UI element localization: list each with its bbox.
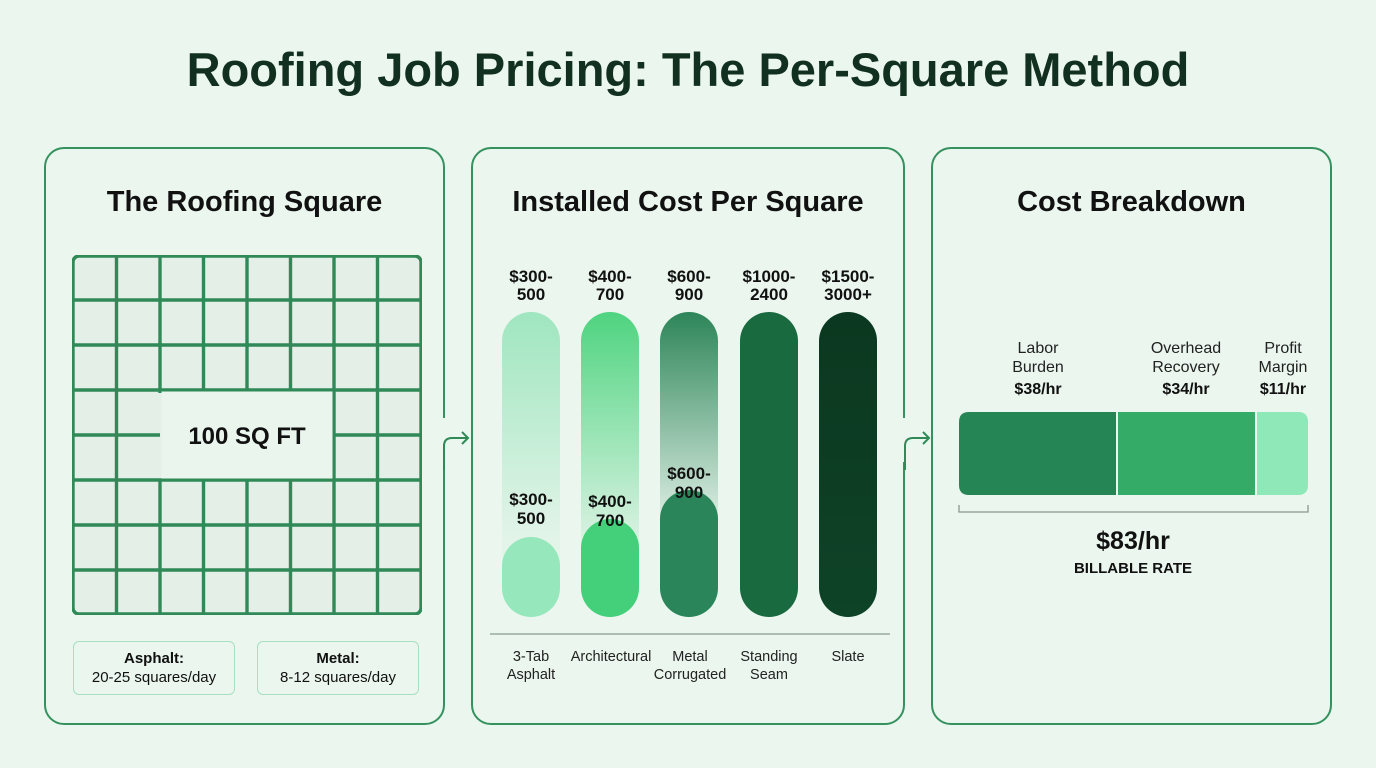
panel: installed cost (471, 147, 905, 725)
bar chart (490, 267, 890, 683)
callout: metal: Metal: (316, 650, 360, 667)
stacked bar chart: Recovery (1152, 359, 1220, 376)
bar chart: Corrugated (654, 667, 726, 683)
callout: metal (257, 641, 419, 695)
grid illustration (72, 255, 422, 615)
heading: roofing square: The Roofing Square (107, 186, 382, 218)
stacked bar chart: $38/hr (1014, 381, 1062, 398)
bar chart: Standing (740, 649, 798, 665)
stacked bar chart: Burden (1012, 359, 1064, 376)
stacked bar chart: Profit (1264, 340, 1302, 357)
stacked bar chart: $11/hr (1260, 381, 1306, 398)
bar chart: 3-Tab (513, 649, 549, 665)
bar chart: $1000- (743, 267, 795, 286)
callout: asphalt (73, 641, 235, 695)
bar chart: 700 (596, 511, 624, 530)
bar chart: Slate (831, 649, 865, 665)
bar chart: 500 (517, 509, 545, 528)
stacked bar chart: Overhead (1151, 340, 1221, 357)
stacked bar chart: Margin (1259, 359, 1307, 376)
label: 100 sq ft: 100 SQ FT (188, 423, 306, 450)
bar chart: 500 (517, 285, 545, 304)
arrow: panel 1 to 2 (443, 418, 470, 446)
bar chart: 900 (675, 285, 703, 304)
callout: asphalt: Asphalt: (124, 650, 184, 667)
bar chart: Metal (672, 649, 708, 665)
bar chart: 2400 (750, 285, 788, 304)
heading: installed cost: Installed Cost Per Square (512, 186, 864, 218)
bar chart: Architectural (571, 649, 651, 665)
arrow: panel 2 to 3 (903, 418, 930, 470)
bar chart: $400- (588, 492, 632, 511)
bar chart: $400- (588, 267, 632, 286)
stacked bar chart: $83/hr (1096, 527, 1170, 555)
callout: asphalt: 20-25 squares/day (92, 669, 216, 686)
bar chart: Seam (750, 667, 788, 683)
bar chart: $300- (509, 267, 553, 286)
bar chart: $300- (509, 490, 553, 509)
callout: metal: 8-12 squares/day (280, 669, 396, 686)
bar chart: 900 (675, 483, 703, 502)
panel: roofing square (44, 147, 445, 725)
bar chart: 3000+ (824, 285, 872, 304)
bar chart: $600- (667, 464, 711, 483)
panel: cost breakdown (931, 147, 1332, 725)
stacked bar chart: BILLABLE RATE (1074, 560, 1192, 577)
bar chart: Asphalt (507, 667, 555, 683)
stacked bar chart: $34/hr (1162, 381, 1210, 398)
bar chart: $600- (667, 267, 711, 286)
heading: cost breakdown: Cost Breakdown (1017, 186, 1246, 218)
title: Roofing Job Pricing: The Per-Square Method (187, 43, 1189, 96)
bar chart: $1500- (822, 267, 874, 286)
bar chart: 700 (596, 285, 624, 304)
stacked bar chart (958, 340, 1309, 577)
stacked bar chart: Labor (1018, 340, 1059, 357)
